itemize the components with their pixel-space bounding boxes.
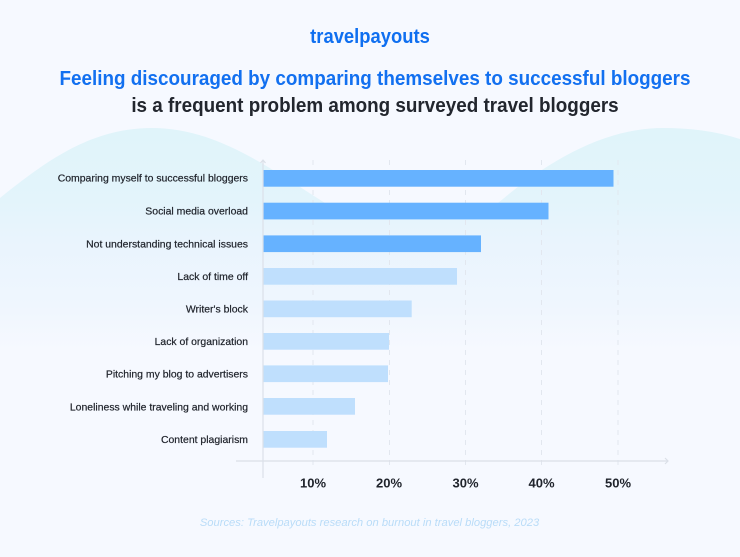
x axis labels: 20% xyxy=(376,476,402,490)
category labels: Content plagiarism xyxy=(161,435,248,446)
axes xyxy=(236,160,668,478)
x axis labels: 30% xyxy=(452,476,479,490)
category labels: Lack of time off xyxy=(177,272,248,283)
category labels: Loneliness while traveling and working xyxy=(70,402,248,414)
category labels: Comparing myself to successful bloggers xyxy=(58,174,248,184)
category labels: Writer's block xyxy=(186,304,249,316)
title line 1: Feeling discouraged by comparing themselves to successful bloggers xyxy=(60,67,690,90)
category labels xyxy=(58,174,249,446)
category labels: Not understanding technical issues xyxy=(86,240,248,250)
category labels: Lack of organization xyxy=(155,337,248,348)
category labels: Pitching my blog to advertisers xyxy=(106,370,248,380)
source note: Sources: Travelpayouts research on burnout in travel bloggers, 2023 xyxy=(200,517,539,529)
x axis labels: 10% xyxy=(300,476,326,490)
title xyxy=(60,67,690,116)
title line 2: is a frequent problem among surveyed travel bloggers xyxy=(131,94,619,116)
x axis labels: 40% xyxy=(528,476,555,490)
bars xyxy=(263,170,614,448)
x axis labels xyxy=(300,476,631,490)
logo: travelpayouts xyxy=(310,26,430,48)
category labels: Social media overload xyxy=(145,206,248,218)
x axis labels: 50% xyxy=(605,476,631,490)
